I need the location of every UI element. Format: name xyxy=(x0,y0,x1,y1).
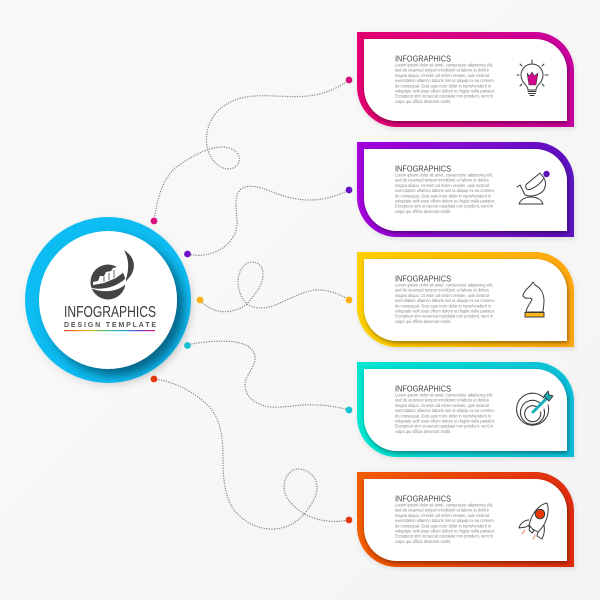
body text: Excepteur sint occaecat cupidatat non proident, sunt in xyxy=(395,204,493,209)
body text: voluptate velit esse cillum dolore eu fugiat nulla pariatur. xyxy=(395,198,495,204)
body text: sed do eiusmod tempor incididunt ut labore et dolore xyxy=(395,288,489,293)
body text: culpa qui officia deserunt mollit. xyxy=(395,539,451,544)
central circle xyxy=(25,217,191,383)
body text xyxy=(395,282,495,324)
icon: target with arrow xyxy=(517,391,553,425)
card 5 xyxy=(357,472,574,567)
body text: magna aliqua. Ut enim ad minim veniam, quis nostrud xyxy=(395,403,489,408)
dotted connector 2 xyxy=(187,186,349,255)
body text: do consequat. Duis aute irure dolor in reprehenderit in xyxy=(395,193,491,198)
body text: voluptate velit esse cillum dolore eu fugiat nulla pariatur. xyxy=(395,308,495,314)
logo title: INFOGRAPHICS xyxy=(64,304,156,321)
icon: rocket xyxy=(519,503,548,539)
body text: exercitation ullamco laboris nisi ut aliquip ex ea commo- xyxy=(395,298,495,303)
body text: voluptate velit esse cillum dolore eu fugiat nulla pariatur. xyxy=(395,528,495,534)
logo icon xyxy=(88,250,134,300)
heading: INFOGRAPHICS xyxy=(395,53,451,63)
card 4 xyxy=(357,362,574,457)
body text: Excepteur sint occaecat cupidatat non proident, sunt in xyxy=(395,424,493,429)
card 2 xyxy=(357,142,574,237)
body text: Lorem ipsum dolor sit amet, consectetur adipiscing elit, xyxy=(395,502,493,508)
body text xyxy=(395,172,495,214)
body text: culpa qui officia deserunt mollit. xyxy=(395,99,451,104)
heading: INFOGRAPHICS xyxy=(395,383,451,393)
body text: exercitation ullamco laboris nisi ut aliquip ex ea commo- xyxy=(395,518,495,523)
card 3 xyxy=(357,252,574,347)
body text: magna aliqua. Ut enim ad minim veniam, quis nostrud xyxy=(395,183,489,188)
logo subtitle: DESIGN TEMPLATE xyxy=(64,322,156,329)
body text: sed do eiusmod tempor incididunt ut labore et dolore xyxy=(395,508,489,513)
body text: exercitation ullamco laboris nisi ut aliquip ex ea commo- xyxy=(395,188,495,193)
body text: do consequat. Duis aute irure dolor in reprehenderit in xyxy=(395,83,491,88)
body text xyxy=(395,62,495,104)
blue ring xyxy=(25,217,191,383)
heading: INFOGRAPHICS xyxy=(395,273,451,283)
body text: Lorem ipsum dolor sit amet, consectetur adipiscing elit, xyxy=(395,392,493,398)
body text: voluptate velit esse cillum dolore eu fugiat nulla pariatur. xyxy=(395,418,495,424)
body text: Excepteur sint occaecat cupidatat non proident, sunt in xyxy=(395,94,493,99)
body text: magna aliqua. Ut enim ad minim veniam, quis nostrud xyxy=(395,513,489,518)
body text: culpa qui officia deserunt mollit. xyxy=(395,319,451,324)
body text: Lorem ipsum dolor sit amet, consectetur adipiscing elit, xyxy=(395,282,493,288)
body text: do consequat. Duis aute irure dolor in reprehenderit in xyxy=(395,303,491,308)
dotted connector 1 xyxy=(154,80,349,221)
body text: exercitation ullamco laboris nisi ut aliquip ex ea commo- xyxy=(395,408,495,413)
body text: Excepteur sint occaecat cupidatat non proident, sunt in xyxy=(395,314,493,319)
dotted connector 4 xyxy=(187,341,349,410)
icon: microscope xyxy=(517,171,550,204)
heading: INFOGRAPHICS xyxy=(395,163,451,173)
body text: Excepteur sint occaecat cupidatat non proident, sunt in xyxy=(395,534,493,539)
card 1 xyxy=(357,32,574,127)
body text xyxy=(395,392,495,434)
body text: do consequat. Duis aute irure dolor in reprehenderit in xyxy=(395,523,491,528)
body text: magna aliqua. Ut enim ad minim veniam, quis nostrud xyxy=(395,73,489,78)
body text: voluptate velit esse cillum dolore eu fugiat nulla pariatur. xyxy=(395,88,495,94)
body text: do consequat. Duis aute irure dolor in reprehenderit in xyxy=(395,413,491,418)
body text: Lorem ipsum dolor sit amet, consectetur adipiscing elit, xyxy=(395,172,493,178)
body text: exercitation ullamco laboris nisi ut aliquip ex ea commo- xyxy=(395,78,495,83)
body text: sed do eiusmod tempor incididunt ut labore et dolore xyxy=(395,398,489,403)
body text xyxy=(395,502,495,544)
rainbow line xyxy=(64,330,155,331)
white disc xyxy=(39,231,177,369)
dotted connector 5 xyxy=(154,379,349,529)
dots xyxy=(151,77,352,523)
dotted connector 3 xyxy=(200,262,349,312)
body text: culpa qui officia deserunt mollit. xyxy=(395,429,451,434)
body text: sed do eiusmod tempor incididunt ut labore et dolore xyxy=(395,178,489,183)
heading: INFOGRAPHICS xyxy=(395,493,451,503)
body text: magna aliqua. Ut enim ad minim veniam, quis nostrud xyxy=(395,293,489,298)
icon: light bulb xyxy=(517,60,548,96)
body text: culpa qui officia deserunt mollit. xyxy=(395,209,451,214)
icon: chess knight xyxy=(523,282,544,317)
body text: sed do eiusmod tempor incididunt ut labore et dolore xyxy=(395,68,489,73)
body text: Lorem ipsum dolor sit amet, consectetur adipiscing elit, xyxy=(395,62,493,68)
